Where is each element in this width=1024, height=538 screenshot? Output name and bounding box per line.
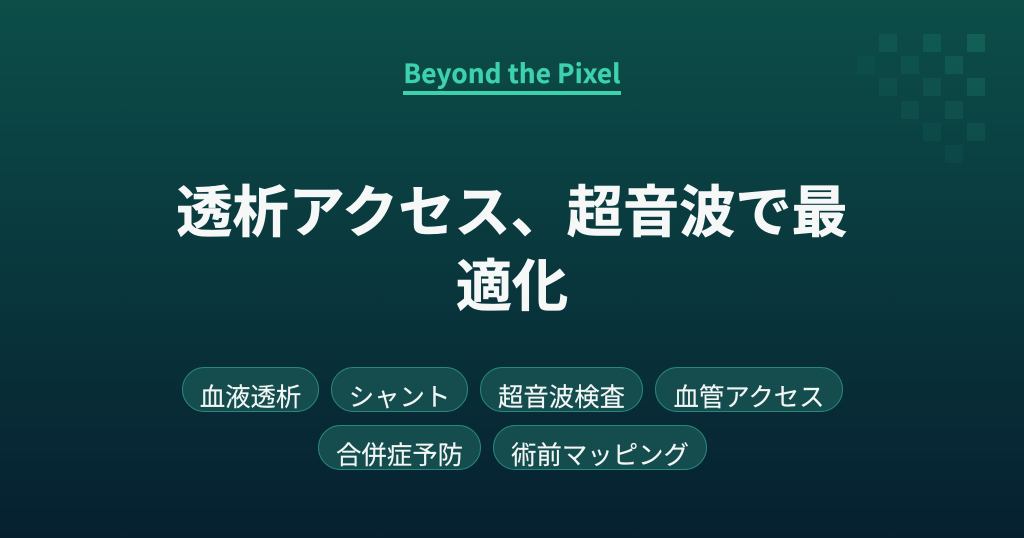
tag: 合併症予防 (318, 425, 481, 470)
tag: シャント (331, 367, 468, 412)
tag: 血管アクセス (655, 367, 843, 412)
tag: 超音波検査: 超音波検査 (498, 378, 625, 414)
tag: 術前マッピング (493, 425, 707, 470)
decorative square pattern (879, 34, 985, 141)
tag: 血液透析: 血液透析 (200, 378, 301, 414)
tag: シャント: シャント (349, 378, 450, 414)
brand label: Beyond the Pixel: Beyond the Pixel (403, 54, 621, 91)
tag list (182, 367, 843, 472)
tag: 血液透析 (182, 367, 319, 412)
title: 透析アクセス、超音波で最 (176, 168, 848, 249)
tag: 超音波検査 (480, 367, 643, 412)
tag: 術前マッピング: 術前マッピング (511, 436, 689, 472)
title (176, 168, 848, 323)
tag: 合併症予防: 合併症予防 (336, 436, 463, 472)
title: 適化 (456, 242, 568, 323)
tag: 血管アクセス: 血管アクセス (673, 378, 825, 414)
